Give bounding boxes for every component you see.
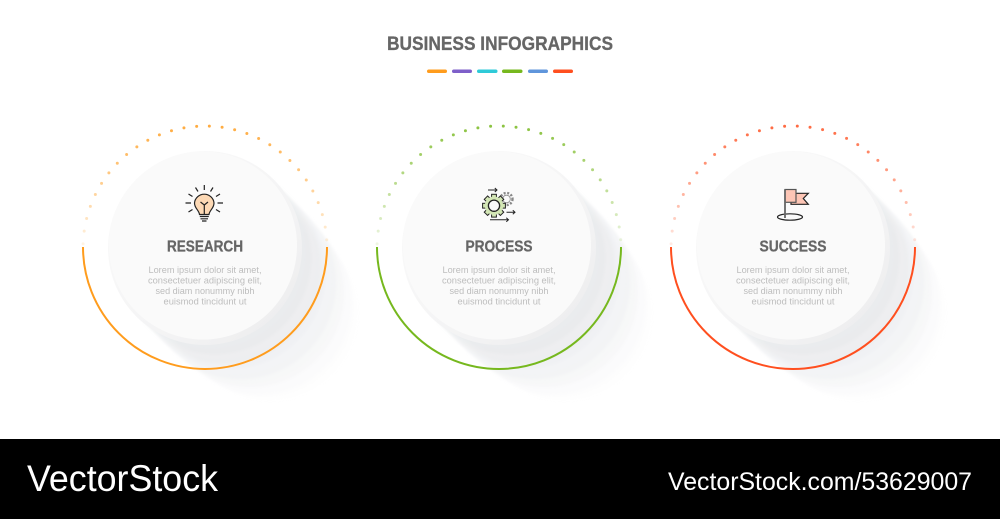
dotted arc [671,126,915,248]
panel: research [83,126,358,401]
title: BUSINESS INFOGRAPHICS [387,34,613,55]
heading: RESEARCH [167,238,243,256]
body text [442,265,556,306]
outer disc [402,151,596,345]
colour legend dashes [427,70,573,73]
body text: consectetuer adipiscing elit, [148,276,262,286]
heading: PROCESS [466,238,533,256]
body text [148,265,262,306]
body text [736,265,850,306]
body text: consectetuer adipiscing elit, [736,276,850,286]
body text: Lorem ipsum dolor sit amet, [736,265,850,275]
inner disc [403,152,591,340]
body text: euismod tincidunt ut [458,296,541,306]
body text: Lorem ipsum dolor sit amet, [148,265,262,275]
panel: process [377,126,652,401]
panel: success [671,126,946,401]
body text: Lorem ipsum dolor sit amet, [442,265,556,275]
footer url text: VectorStock.com/53629007 [668,468,972,496]
outer disc [108,151,302,345]
body text: euismod tincidunt ut [752,296,835,306]
footer band [0,439,1000,519]
icon: gears and arrows [483,188,515,222]
body text: consectetuer adipiscing elit, [442,276,556,286]
icon: flag [778,190,808,220]
dotted arc [377,126,621,248]
body text: sed diam nonummy nibh [744,286,842,296]
body text: sed diam nonummy nibh [156,286,254,296]
solid arc [83,247,327,369]
body text: sed diam nonummy nibh [450,286,548,296]
inner disc [109,152,297,340]
body text: euismod tincidunt ut [164,296,247,306]
heading: SUCCESS [760,238,827,256]
solid arc [377,247,621,369]
outer disc [696,151,890,345]
inner disc [697,152,885,340]
icon: light bulb [186,185,223,221]
solid arc [671,247,915,369]
footer logo text: VectorStock [27,458,218,499]
dotted arc [83,126,327,248]
